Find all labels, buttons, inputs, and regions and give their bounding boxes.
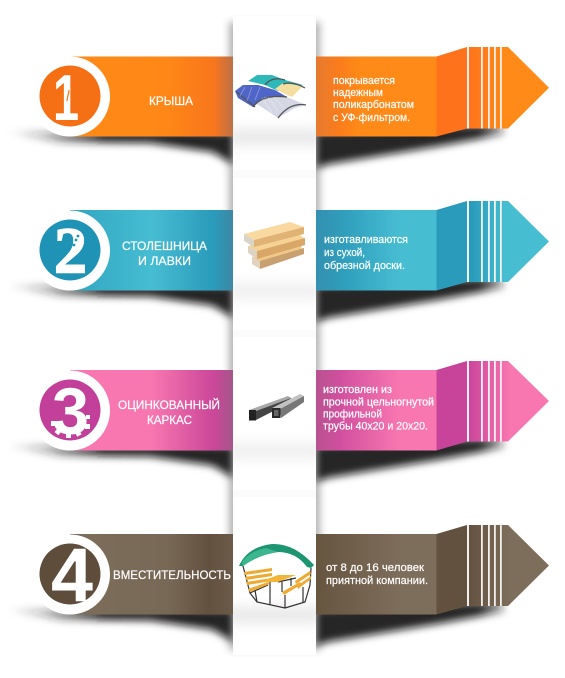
row 3 shadows [5,438,505,482]
number badge 1: 1 [53,61,79,134]
left ribbon [70,56,233,136]
number badge 3: 3 [52,374,89,448]
panel: row 1 roof [30,47,549,136]
description: прочной цельногнутой [323,396,434,408]
folded arrow [436,361,549,450]
heading: И ЛАВКИ [138,254,191,268]
description: надежным [333,87,383,99]
description: с УФ-фильтром. [333,112,410,124]
panel: row 3 galvanized frame [30,361,549,450]
description: трубы 40х20 и 20х20. [323,420,428,432]
description: изготавливаются [324,234,408,246]
number badge 2: 2 [54,214,87,288]
description: покрывается [333,75,395,87]
panel: row 4 capacity [30,525,549,618]
description: от 8 до 16 человек [326,562,424,574]
description: поликарбонатом [333,99,414,111]
left ribbon [70,370,233,450]
number badge 4: 4 [51,533,93,618]
heading: КАРКАС [147,413,192,427]
number badge 4 [30,533,110,618]
heading: СТОЛЕШНИЦА [122,239,207,253]
icon: wooden planks [244,222,305,269]
icon: polycarbonate sheets [235,75,306,118]
heading [118,397,220,427]
heading: КРЫША [149,94,193,108]
description [324,234,408,272]
heading [122,239,207,268]
number badge 1 [30,56,110,136]
right ribbon [316,56,436,136]
gear teeth [51,415,90,438]
description [326,562,428,587]
heading: ВМЕСТИТЕЛЬНОСТЬ [113,568,231,582]
right ribbon [316,370,436,450]
number badge 3 [30,370,110,450]
row 2 shadows [5,278,505,322]
description: профильной [323,408,382,420]
central white column [229,22,320,650]
folded arrow [436,525,549,614]
panel: row 2 table top and benches [30,201,549,290]
row 1 shadows [5,124,505,168]
right ribbon [316,534,436,614]
left ribbon [70,534,233,614]
row 4 shadows [5,602,505,646]
icon: steel tubes [249,394,304,420]
folded arrow [436,201,549,290]
description [323,384,434,432]
description: приятной компании. [326,575,428,587]
icon: gazebo [239,544,314,608]
right ribbon [316,210,436,290]
description [333,75,414,124]
left ribbon [70,210,233,290]
description: из сухой, [324,247,365,259]
description: изготовлен из [323,384,392,396]
heading: ОЦИНКОВАННЫЙ [118,397,220,412]
column surface [225,16,324,655]
number badge 2 [30,210,110,290]
description: обрезной доски. [324,260,405,272]
folded arrow [436,47,549,136]
